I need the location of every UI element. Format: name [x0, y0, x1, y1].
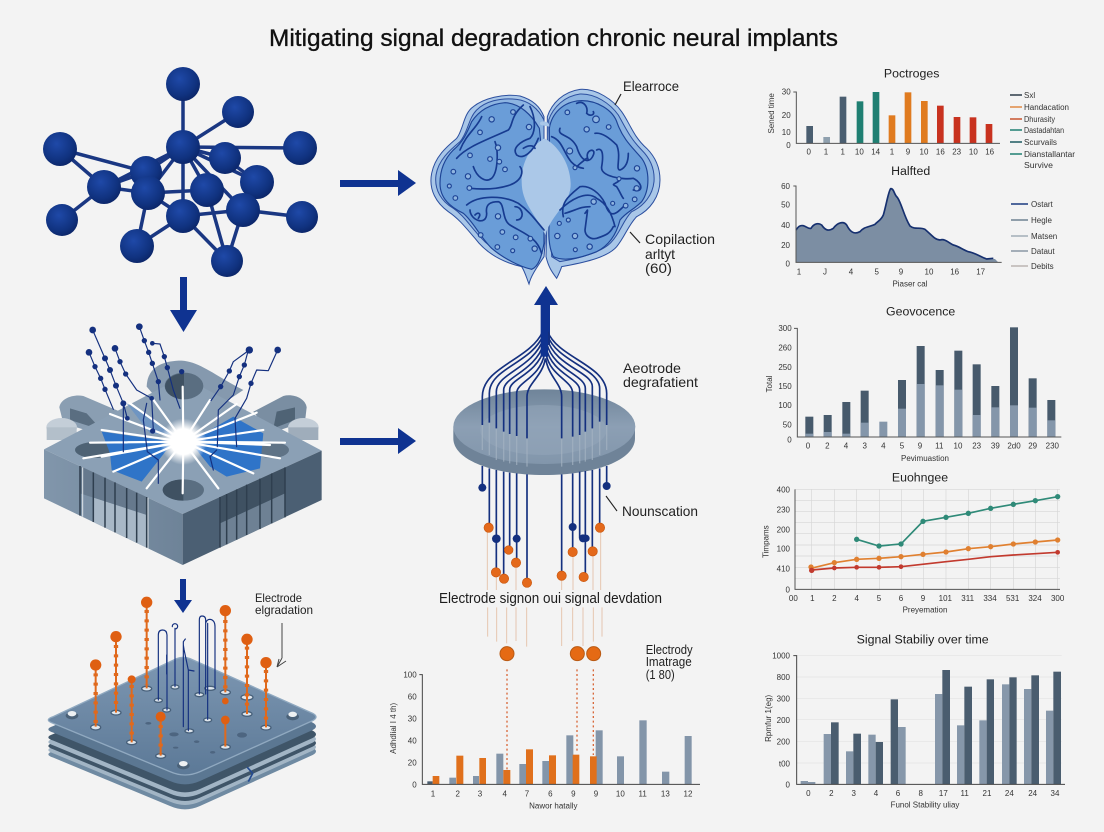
- degradation spots: [145, 722, 247, 754]
- label: signal deviation caption: Electrode signon oui signal devdation: [439, 590, 662, 607]
- diagram: electrode disc with wires: [453, 297, 635, 590]
- legend: poctroges: Handacation: [1024, 103, 1069, 112]
- legend: halfted: Dataut: [1031, 247, 1055, 256]
- legend: halfted: Hegle: [1031, 216, 1052, 225]
- axis labels: 531: [1006, 594, 1020, 603]
- axis labels: 7: [525, 789, 530, 798]
- axis labels: t00: [779, 759, 791, 768]
- diagram: electrode plate: [48, 597, 316, 809]
- bolts: [66, 711, 299, 769]
- axis labels: 60: [781, 182, 791, 191]
- legend: halfted: Debits: [1031, 262, 1054, 271]
- upper fan wires: [482, 332, 607, 438]
- axis labels: 3: [851, 789, 856, 798]
- axis labels: 5: [877, 594, 882, 603]
- axis labels: 16: [950, 267, 960, 276]
- axis labels: Pevimuastion: [901, 454, 949, 463]
- axis labels: 150: [778, 382, 792, 391]
- axis labels: 10: [782, 128, 791, 137]
- label: aeotrode degrafatient: [623, 360, 698, 390]
- bars: [449, 720, 692, 784]
- axis labels: 60: [408, 693, 417, 702]
- stacked bars: [805, 327, 1055, 437]
- axis labels: Preyemation: [903, 605, 947, 614]
- axis labels: 6: [899, 594, 904, 603]
- axis labels: 10: [855, 148, 864, 157]
- axis labels: 50: [781, 200, 791, 209]
- axis labels: [781, 182, 986, 289]
- axis labels: 200: [777, 525, 791, 534]
- chart: halfted area chart: Halfted: [891, 164, 930, 178]
- chart: geovocence stacked bars: Geovocence: [886, 305, 955, 319]
- label: electrode imatrage: [646, 643, 693, 682]
- axis labels: 0: [786, 585, 791, 594]
- axis labels: 24: [1005, 789, 1014, 798]
- label: aeotrode degrafatient: degrafatient: [623, 374, 698, 390]
- axis labels: 200: [777, 716, 791, 725]
- axis labels: 21: [983, 789, 992, 798]
- axis labels: 0: [787, 435, 792, 444]
- axis labels: 1: [797, 267, 802, 276]
- label: electrode degradation: Electrode: [255, 591, 302, 605]
- axis labels: 0: [786, 259, 791, 268]
- axis labels: 9: [594, 789, 599, 798]
- wires with beads: [86, 323, 281, 483]
- axis labels: 24: [1028, 789, 1038, 798]
- axis labels: 260: [778, 343, 792, 352]
- axis labels: 34: [1051, 789, 1060, 798]
- legend: poctroges: Dianstallantar: [1024, 150, 1075, 159]
- axis labels: 100: [777, 545, 791, 554]
- axis labels: 9: [571, 789, 576, 798]
- line: teal: [854, 494, 1060, 549]
- axis labels: 8: [918, 789, 923, 798]
- chart: electrode stability: [389, 607, 700, 811]
- label: aeotrode degrafatient: Aeotrode: [623, 360, 681, 376]
- axis labels: 11: [935, 441, 944, 450]
- navy balls: [478, 482, 611, 543]
- chart: signal stability over time: Signal Stabiliy over time: [857, 632, 989, 646]
- axis labels: 410: [777, 565, 791, 574]
- legend: poctroges: [1010, 91, 1075, 170]
- axis labels: Funol Stability uliay: [891, 800, 959, 809]
- axis labels: [764, 652, 1060, 809]
- axis labels: [767, 88, 995, 157]
- arrow: disc to brain: [534, 286, 558, 345]
- axis labels: [389, 671, 693, 811]
- axis labels: 230: [1046, 441, 1060, 450]
- arrow: molecule to device: [170, 277, 197, 332]
- axis labels: 0: [806, 789, 811, 798]
- diagram: brain cross-section: [431, 89, 660, 284]
- axis labels: 9: [906, 148, 911, 157]
- diagram: isometric electrode device: [44, 323, 322, 565]
- label: copilaction callout: arltyt: [645, 246, 675, 262]
- axis labels: 1: [840, 148, 845, 157]
- axis labels: 311: [961, 594, 975, 603]
- axis labels: 0: [806, 441, 811, 450]
- axis labels: 0: [786, 781, 791, 790]
- axis labels: 0: [806, 148, 811, 157]
- label: electrode imatrage: Imatrage: [646, 655, 692, 669]
- label: nounscation: [606, 496, 698, 519]
- axis labels: 1000: [772, 652, 791, 661]
- axis labels: 30: [782, 88, 791, 97]
- line: orange: [808, 537, 1060, 570]
- wire reflections: [482, 422, 607, 467]
- axis labels: Piaser cal: [892, 280, 928, 289]
- axis labels: 23: [952, 148, 962, 157]
- axis labels: 9: [918, 441, 923, 450]
- label: copilaction callout: Copilaction: [645, 231, 715, 247]
- axis labels: 300: [778, 324, 792, 333]
- area: [796, 189, 998, 262]
- legend: poctroges: Dhurasity: [1024, 115, 1055, 124]
- axis labels: 230: [777, 505, 791, 514]
- chart: euohngee line chart: [762, 471, 1065, 614]
- axis labels: 4: [874, 789, 879, 798]
- bars: [801, 684, 1053, 784]
- axis labels: 13: [661, 789, 670, 798]
- axis labels: 2: [825, 441, 830, 450]
- axis labels: 300: [1051, 594, 1065, 603]
- axis labels: 100: [778, 401, 792, 410]
- axis labels: 1: [890, 148, 895, 157]
- axis labels: 29: [1028, 441, 1038, 450]
- chart: signal stability over time: [764, 632, 1065, 809]
- axis labels: J: [823, 267, 827, 276]
- icon: molecular network: [43, 67, 318, 277]
- axis labels: 200: [777, 737, 791, 746]
- chart: poctroges bar chart: Poctroges: [884, 66, 939, 80]
- central ventricle: [522, 138, 571, 235]
- axis labels: 14: [871, 148, 881, 157]
- label: electrode degradation: [255, 591, 313, 617]
- falling peach lines: [488, 607, 602, 647]
- axis labels: 17: [939, 789, 948, 798]
- legend: halfted: Ostart: [1031, 200, 1054, 209]
- orange pins: [90, 597, 272, 756]
- axis labels: 5: [874, 267, 879, 276]
- label: electrode callout: [615, 78, 679, 105]
- axis labels: 250: [778, 363, 792, 372]
- axis labels: 10: [954, 441, 963, 450]
- arrow: electrode degradation leader: [277, 623, 286, 667]
- blue conductive regions: [102, 403, 263, 482]
- chart: geovocence stacked bars: [765, 305, 1061, 463]
- legend: poctroges: Scurvails: [1024, 138, 1057, 147]
- arrow: device to disc: [340, 428, 416, 454]
- grid: [797, 656, 1062, 763]
- axis labels: 2: [829, 789, 834, 798]
- label: electrode imatrage: (1 80): [646, 668, 675, 682]
- signal markers: [500, 647, 601, 661]
- arrow: molecule to brain: [340, 170, 416, 196]
- axis labels: 4: [854, 594, 859, 603]
- label: electrode imatrage: Electrody: [646, 643, 693, 657]
- axis labels: 6: [896, 789, 901, 798]
- legend: halfted: [1011, 200, 1057, 271]
- holes: [75, 373, 289, 501]
- axis labels: 16: [985, 148, 995, 157]
- label: nounscation: Nounscation: [622, 503, 698, 519]
- axis labels: 324: [1028, 594, 1042, 603]
- chart: euohngee line chart: Euohngee: [892, 471, 948, 485]
- white rays: [83, 387, 285, 493]
- axis labels: Nawor hatally: [529, 802, 578, 811]
- navy hairpin wires: [158, 616, 215, 731]
- lower wires: [482, 466, 607, 583]
- label: electrode degradation: elgradation: [255, 603, 313, 617]
- line: red: [809, 550, 1060, 573]
- axis labels: 10: [925, 267, 934, 276]
- axis labels: 1: [431, 789, 436, 798]
- legend: halfted: Matsen: [1031, 232, 1057, 241]
- axis labels: Rpmfur 1(eg): [764, 694, 773, 742]
- arrow: device to plate: [174, 579, 192, 613]
- axis labels: 6: [548, 789, 553, 798]
- axis labels: 00: [789, 594, 798, 603]
- orange balls: [484, 523, 605, 587]
- axis labels: 300: [777, 694, 791, 703]
- chart: halfted area chart: [781, 164, 1002, 289]
- axis labels: 23: [972, 441, 982, 450]
- axis labels: 20: [782, 111, 791, 120]
- axis labels: 40: [408, 736, 417, 745]
- small connector: [247, 767, 253, 782]
- label: electrode callout: Elearroce: [623, 78, 679, 94]
- slat panels: [80, 466, 285, 548]
- axis labels: Timpams: [762, 525, 771, 558]
- axis labels: 40: [781, 221, 791, 230]
- axis labels: 3: [862, 441, 867, 450]
- axis labels: 4: [881, 441, 886, 450]
- cell dots: [447, 110, 640, 253]
- axis labels: 50: [783, 421, 792, 430]
- axis labels: 334: [983, 594, 997, 603]
- legend: poctroges: Survive: [1024, 161, 1054, 170]
- axis labels: 3: [478, 789, 483, 798]
- chart: poctroges bar chart: [767, 66, 1000, 157]
- pale peach lines: [487, 532, 601, 590]
- axis labels: 0: [412, 780, 417, 789]
- axis labels: 30: [408, 714, 417, 723]
- axis labels: 1: [824, 148, 829, 157]
- axis labels: Sened time: [767, 93, 776, 134]
- legend: poctroges: Dastadahtan: [1024, 126, 1064, 135]
- axis labels: 20: [781, 241, 791, 250]
- axis labels: 9: [899, 267, 904, 276]
- axis labels: 101: [939, 594, 953, 603]
- grid: [795, 489, 1060, 589]
- axis labels: 10: [969, 148, 978, 157]
- folds: [457, 102, 641, 253]
- axis labels: 16: [936, 148, 945, 157]
- label: copilaction callout: [630, 231, 715, 276]
- axis labels: 100: [403, 671, 417, 680]
- bars: [806, 92, 992, 143]
- pin bases: [91, 685, 271, 758]
- axis labels: 4: [844, 441, 849, 450]
- axis labels: 11: [961, 789, 969, 798]
- axis labels: 9: [921, 594, 926, 603]
- axis labels: 10: [920, 148, 929, 157]
- axis labels: 2d0: [1007, 441, 1021, 450]
- axis labels: 10: [616, 789, 625, 798]
- axis labels: 5: [900, 441, 905, 450]
- axis labels: 1: [810, 594, 815, 603]
- axis labels: 11: [639, 789, 647, 798]
- axis labels: 2: [832, 594, 837, 603]
- label: copilaction callout: (60): [645, 260, 672, 276]
- axis labels: 39: [991, 441, 1000, 450]
- axis labels: [765, 324, 1060, 463]
- axis labels: 400: [777, 485, 791, 494]
- axis labels: 12: [684, 789, 693, 798]
- axis labels: Adhdlial I 4 th): [389, 702, 398, 754]
- axis labels: 2: [455, 789, 460, 798]
- title: Mitigating signal degradation chronic neural implants: [269, 25, 838, 52]
- axis labels: 20: [408, 759, 417, 768]
- legend: poctroges: Sxl: [1024, 91, 1035, 100]
- axis labels: [762, 485, 1065, 614]
- axis labels: 4: [502, 789, 507, 798]
- axis labels: Total: [765, 375, 774, 392]
- axis labels: 800: [777, 673, 791, 682]
- axis labels: 17: [976, 267, 986, 276]
- axis labels: 4: [849, 267, 854, 276]
- axis labels: 0: [786, 141, 791, 150]
